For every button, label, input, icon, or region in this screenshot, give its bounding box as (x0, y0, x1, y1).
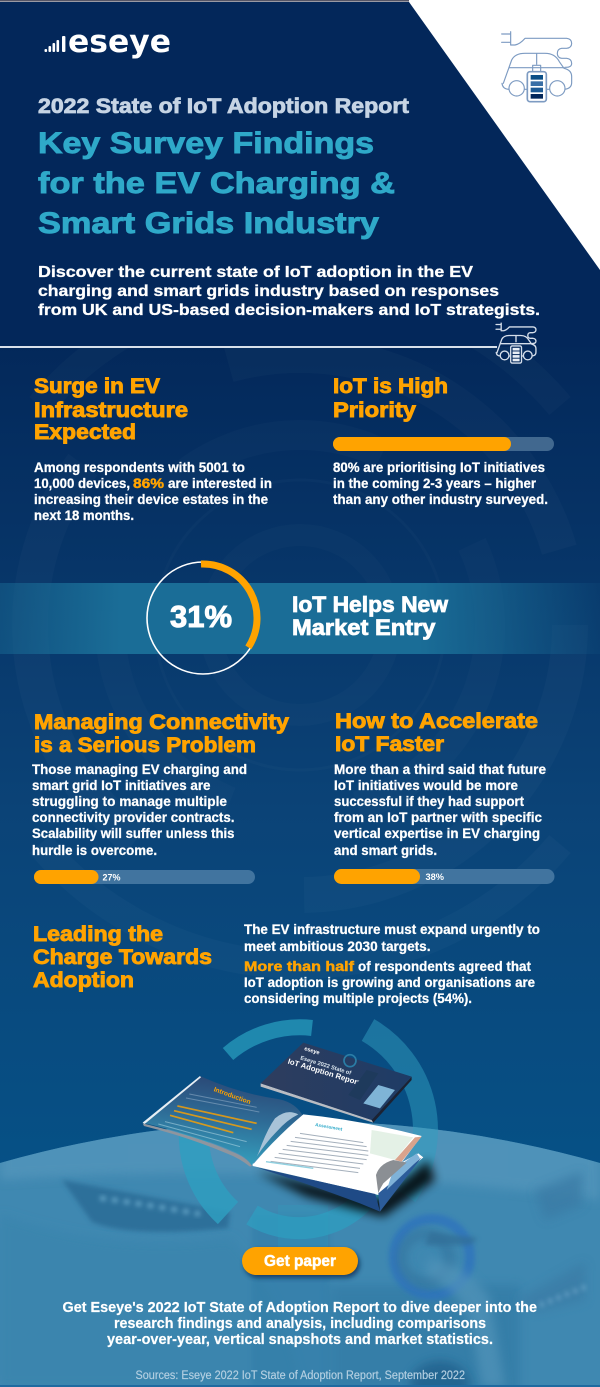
text: accelerate body: IoT initiatives would be more (334, 778, 518, 793)
heading: surge: Expected (34, 421, 136, 444)
closed report cover: IoT Adoption Report (287, 1057, 362, 1087)
panel: managing connectivity (32, 711, 289, 884)
title: Key Survey Findings (38, 127, 374, 160)
text: surge body: increasing their device estates in the (34, 492, 268, 507)
closed report cover: Eseye 2022 State of (299, 1056, 352, 1077)
heading: surge: Surge in EV (34, 375, 160, 398)
text: connectivity body (32, 762, 247, 858)
logo: eseye (68, 24, 171, 60)
call to action text: year-over-year, vertical snapshots and market statistics. (107, 1332, 493, 1348)
text: connectivity body: Those managing EV charging and (32, 762, 247, 777)
title: Smart Grids Industry (38, 207, 379, 240)
get paper button (242, 1247, 360, 1278)
donut chart: 31% (147, 562, 259, 674)
text: accelerate body: from an IoT partner with specific (334, 810, 542, 825)
text: priority body (333, 460, 548, 507)
get paper button: Get paper (264, 1253, 336, 1270)
text: leading body: IoT adoption is growing and organisations are (244, 975, 535, 990)
right page text (266, 1122, 422, 1173)
heading: priority (333, 375, 448, 422)
progress bar: 27%: 27% (102, 872, 121, 884)
intro text: charging and smart grids industry based on responses (38, 283, 499, 300)
left page (143, 1076, 303, 1165)
page curl (376, 1160, 407, 1193)
text: leading body: of respondents agreed that (358, 959, 531, 974)
background tech rings (30, 285, 570, 965)
text: leading body (244, 922, 540, 1006)
heading: surge (34, 375, 188, 444)
text: surge body (34, 460, 272, 523)
heading: accelerate: IoT Faster (335, 733, 444, 756)
heading: priority: Priority (333, 399, 416, 422)
text: priority body: in the coming 2-3 years – higher (333, 476, 537, 491)
call to action text: Get Eseye's 2022 IoT State of Adoption Report to dive deeper into the (62, 1300, 537, 1316)
closed report cover: eseye (303, 1046, 320, 1057)
report booklet mockup (143, 1043, 435, 1217)
progress bar: 38%: 38% (426, 872, 445, 883)
text: connectivity body: struggling to manage multiple (32, 794, 227, 809)
open booklet base (253, 1153, 423, 1195)
bottom edge strip (0, 1385, 600, 1387)
text: connectivity body: smart grid IoT initiatives are (32, 778, 211, 793)
right page text: Assessment (315, 1122, 343, 1132)
text: connectivity body: connectivity provider contracts. (32, 810, 234, 825)
text: leading body: The EV infrastructure must expand urgently to (244, 922, 540, 937)
panel: IoT is high priority (333, 375, 554, 507)
text: leading body: considering multiple projects (54%). (244, 991, 472, 1006)
heading: market entry: IoT Helps New (292, 592, 449, 617)
left page text lines: Introduction (213, 1086, 252, 1106)
progress bar: 27% (34, 870, 255, 884)
heading: leading (33, 923, 212, 992)
intro text: Discover the current state of IoT adoption in the EV (38, 264, 473, 281)
left page photo (257, 1112, 298, 1157)
right page (253, 1114, 422, 1193)
heading: connectivity (34, 711, 289, 757)
text: leading body: More than half (244, 958, 354, 974)
heading: connectivity: Managing Connectivity (34, 711, 289, 734)
heading: surge: Infrastructure (34, 399, 188, 422)
text: accelerate body: successful if they had support (334, 794, 524, 809)
left page text lines (158, 1086, 259, 1147)
heading: leading: Charge Towards (33, 946, 212, 969)
heading: leading: Adoption (33, 969, 134, 992)
cyan ring graphic (194, 1027, 425, 1250)
progress bar: 80% (333, 437, 554, 451)
divider line (0, 346, 497, 348)
text: surge body: Among respondents with 5001 to (34, 460, 245, 475)
text: leading body: meet ambitious 2030 targets. (244, 939, 430, 954)
panel: leading the charge (33, 922, 540, 1006)
heading: leading: Leading the (33, 923, 163, 946)
footer photo dome: car and charger (0, 1115, 600, 1387)
heading: priority: IoT is High (333, 375, 448, 398)
text: accelerate body (334, 762, 546, 858)
panel: surge in EV infrastructure (34, 375, 272, 523)
text: accelerate body: More than a third said that future (334, 762, 546, 777)
booklet shadow (257, 1160, 435, 1217)
call to action text: research findings and analysis, including comparisons (114, 1316, 486, 1332)
heading: market entry: Market Entry (292, 615, 436, 640)
heading: accelerate: How to Accelerate (335, 710, 538, 733)
panel: market entry band (0, 562, 600, 674)
closed report cover (261, 1043, 412, 1123)
report label: 2022 State of IoT Adoption Report (38, 95, 409, 118)
heading: market entry (292, 592, 449, 640)
progress bar: 38% (334, 869, 554, 884)
heading: connectivity: is a Serious Problem (34, 734, 256, 757)
text: accelerate body: vertical expertise in EV charging (334, 826, 540, 841)
text: surge body: 10,000 devices, (34, 476, 130, 491)
heading: accelerate (335, 710, 538, 756)
header panel (0, 2, 600, 347)
panel: accelerate IoT (334, 710, 554, 884)
intro text: from UK and US-based decision-makers and IoT strategists. (38, 302, 540, 319)
donut chart: 31%: 31% (170, 599, 232, 634)
icon: EV battery charging small (496, 323, 536, 363)
text: surge body: next 18 months. (34, 508, 134, 523)
intro text (38, 264, 540, 319)
call to action text (62, 1300, 537, 1348)
text: connectivity body: hurdle is overcome. (32, 843, 157, 858)
title: for the EV Charging & (38, 167, 395, 200)
text: surge body: are interested in (168, 476, 272, 491)
text: priority body: than any other industry surveyed. (333, 492, 548, 507)
text: accelerate body: and smart grids. (334, 843, 437, 858)
sources note: Sources: Eseye 2022 IoT State of Adoption Report, September 2022 (136, 1370, 465, 1382)
title (38, 127, 395, 240)
text: priority body: 80% are prioritising IoT initiatives (333, 460, 545, 475)
icon: EV battery charging large (502, 32, 572, 102)
page background (0, 340, 600, 1387)
text: surge body: 86% (133, 475, 165, 491)
text: connectivity body: Scalability will suffer unless this (32, 826, 234, 841)
